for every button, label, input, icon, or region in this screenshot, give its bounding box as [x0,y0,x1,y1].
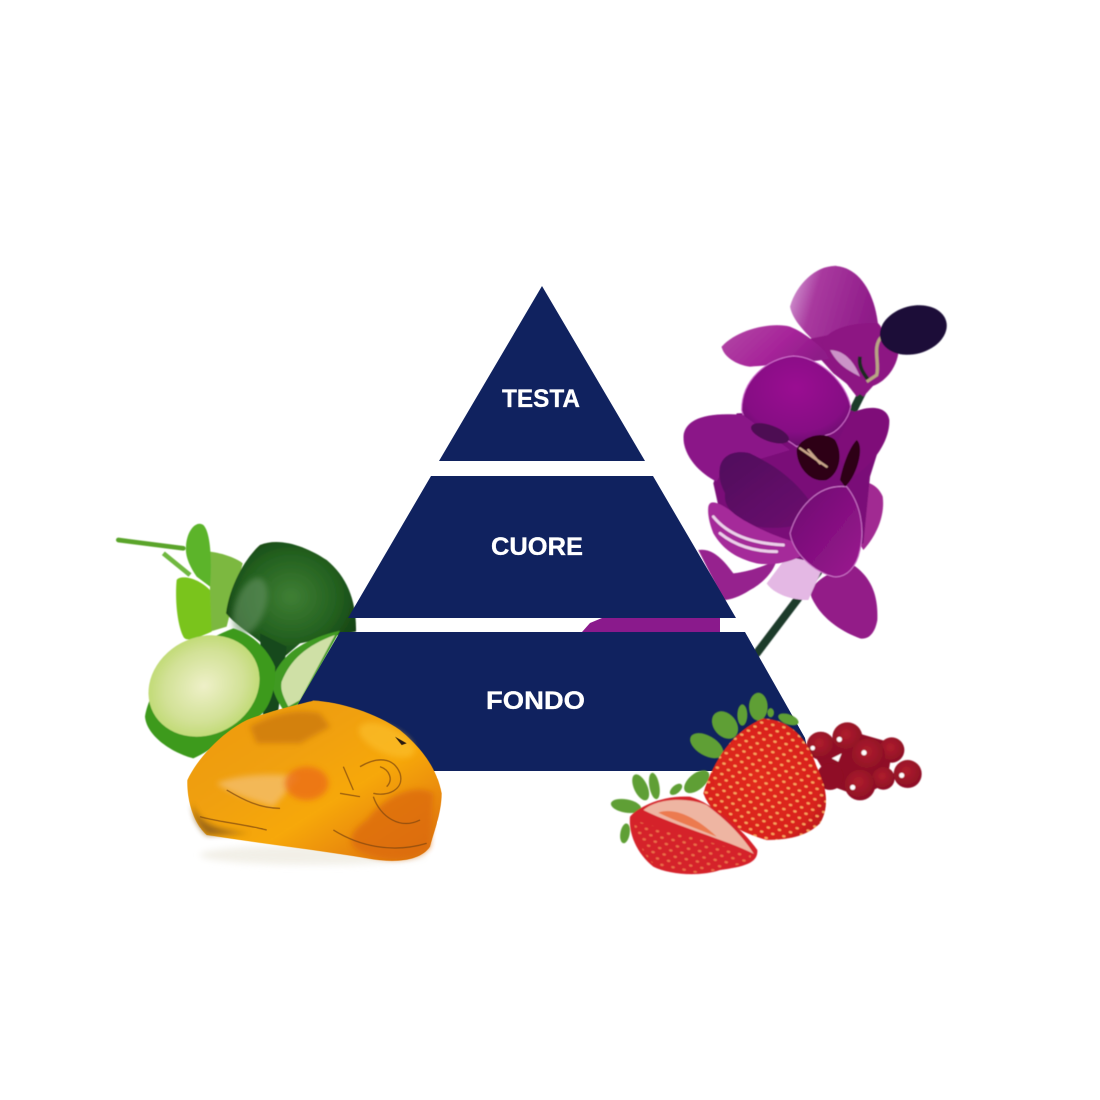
tier: cuore [348,476,736,618]
amber pale reflection [217,775,300,807]
left petal [683,414,790,482]
lime wedge [272,631,340,713]
dark petal shadow [748,419,792,448]
gap orchid strip [582,618,720,632]
bud stalk [860,357,868,380]
label: testa: TESTA [502,385,580,413]
orchid stem [757,380,868,653]
orchid [683,266,952,653]
halved strawberry core [658,811,717,837]
citrus group [118,524,356,758]
leaf stem [118,540,183,548]
vertical leaf [186,524,211,587]
amber dark spot [395,737,407,745]
petal pale highlight [830,350,860,377]
halved strawberry [630,797,757,874]
lime half rind [145,628,275,758]
pale low petal [767,543,823,600]
tier: fondo [259,632,812,771]
lime half flesh [131,616,277,756]
berries [610,693,922,874]
currant cluster [807,722,922,800]
flower bud [874,298,952,362]
upper round petal [742,356,851,447]
amber orange fleck [285,767,328,800]
amber [187,701,442,865]
lower left striped petal [708,502,800,564]
whole strawberry seeds [703,718,826,840]
amber inclusions [200,760,427,848]
wedge flesh [281,635,335,707]
halved strawberry flesh [643,800,754,854]
whole strawberry [703,718,826,840]
orchid column [797,435,860,487]
amber dark lower edge [192,803,250,835]
amber orange glow [351,790,433,859]
upper flower right petal [822,323,898,397]
tier: testa [439,286,645,461]
amber upper facet [250,711,330,743]
pyramid [259,286,812,771]
leaf stalk [163,553,190,575]
right petal [833,408,889,477]
upper flower back petal [790,266,878,357]
upper flower left sepal [722,325,833,367]
front left lip [719,452,820,528]
whole strawberry leaves [680,693,800,797]
white petal streaks [713,517,783,552]
halved strawberry leaves [610,772,684,844]
lime dark underside [260,633,287,720]
side bud flower [698,550,777,600]
lower right petal [843,481,883,550]
amber body [187,701,442,861]
column highlight [800,448,827,467]
main flower base [713,410,887,560]
bud hook [867,337,882,382]
amber yellow glow [354,715,419,765]
back leaf [210,552,243,632]
front right lip [790,486,862,577]
kaffir lime [226,542,356,663]
bottom sepal [810,565,877,639]
upper flower base [803,325,893,397]
halved strawberry seeds [633,820,751,873]
amber shadow [200,845,427,865]
lime highlight [226,573,274,640]
label: fondo: FONDO [486,687,585,715]
front leaf [176,577,212,639]
label: cuore: CUORE [491,533,583,561]
